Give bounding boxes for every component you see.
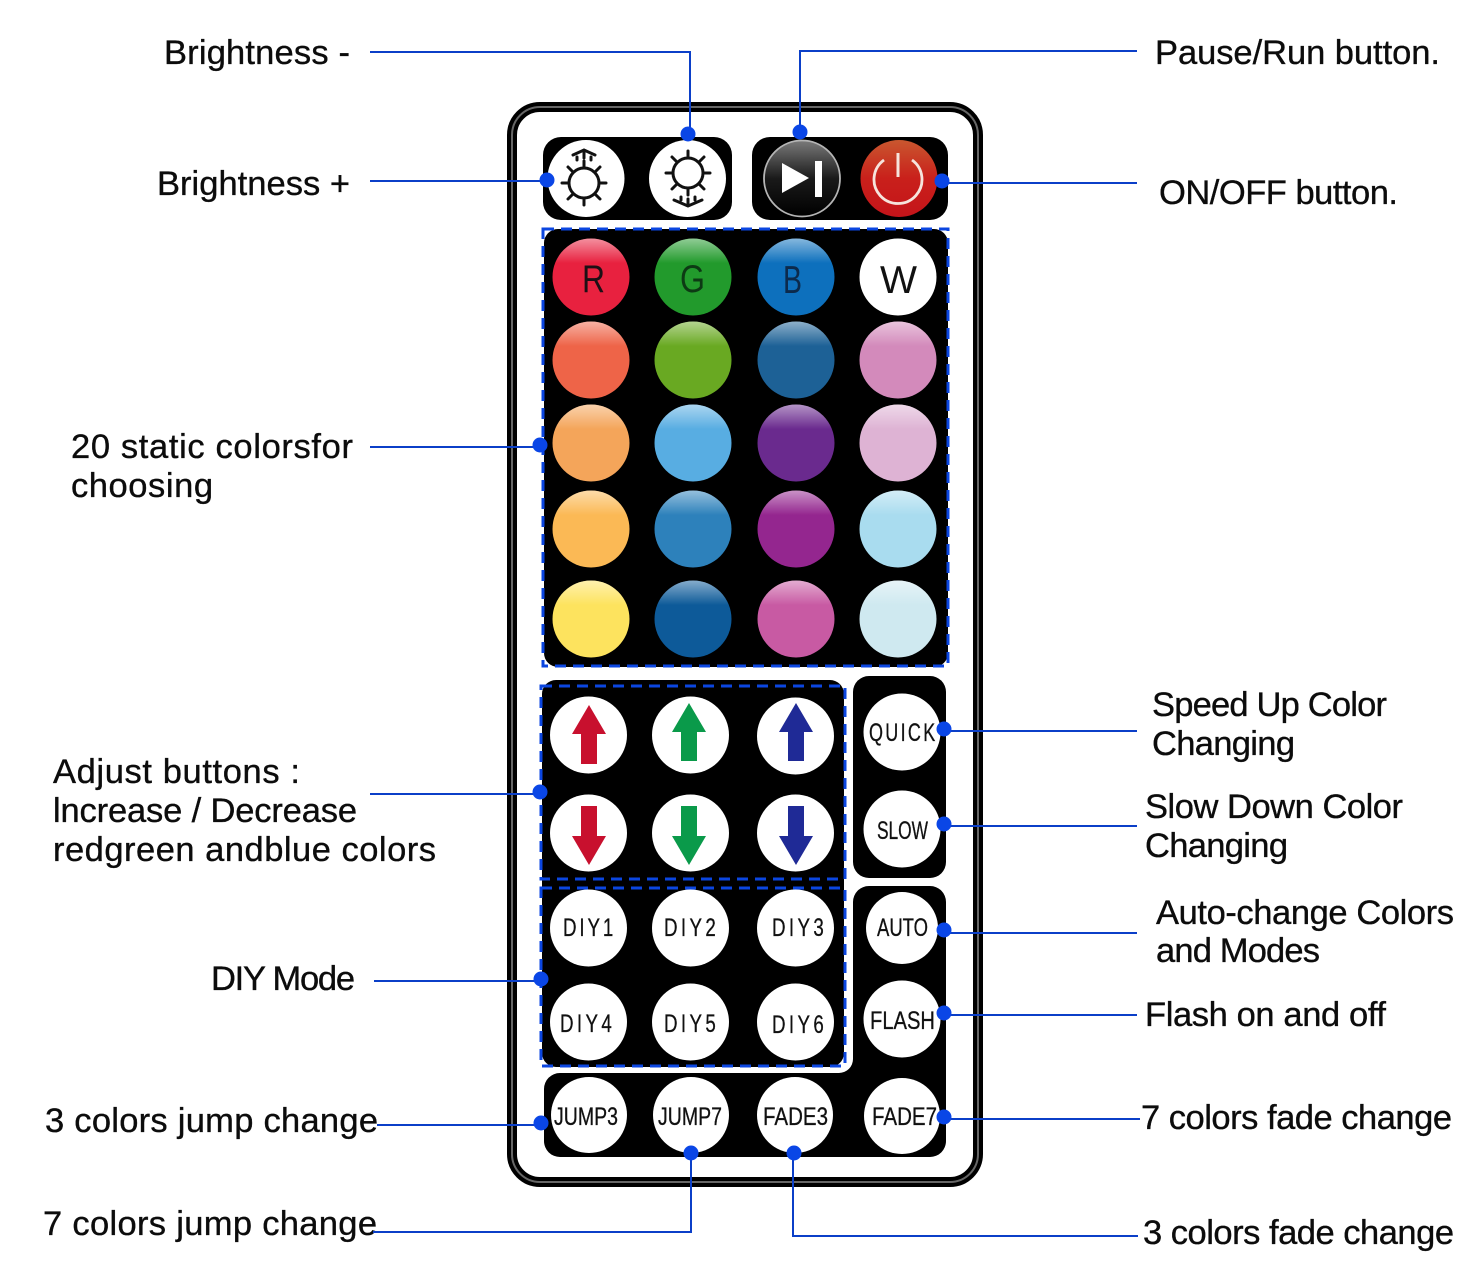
callout: Brightness -: Brightness - bbox=[164, 34, 350, 72]
DIY buttons: DIY1 bbox=[563, 913, 613, 942]
callout: auto change bbox=[936, 894, 1454, 970]
adjust buttons bbox=[541, 686, 845, 879]
callout: 3 colors fade change: 3 colors fade change bbox=[1143, 1214, 1454, 1252]
callout: 7 colors fade change: 7 colors fade change bbox=[1141, 1099, 1452, 1137]
panel: speed buttons: SLOW bbox=[877, 817, 928, 845]
callout: flash bbox=[936, 996, 1386, 1034]
panel: brightness buttons bbox=[543, 137, 732, 220]
callout: adjust buttons: Adjust buttons : bbox=[53, 753, 300, 791]
callout: DIY mode bbox=[211, 960, 548, 998]
row 1 colors: R bbox=[582, 258, 605, 301]
DIY buttons bbox=[541, 888, 845, 1066]
callout: 3 colors jump change bbox=[45, 1102, 548, 1140]
callout: Pause/Run button bbox=[792, 34, 1440, 140]
icon: brightness plus bbox=[548, 140, 624, 217]
icon: pause run bbox=[764, 140, 840, 216]
DIY buttons: DIY2 bbox=[664, 913, 716, 942]
callout: auto change: Auto-change Colors bbox=[1156, 894, 1454, 932]
callout: Brightness + bbox=[157, 165, 554, 203]
DIY buttons: DIY6 bbox=[772, 1010, 824, 1039]
callout: 20 static colors: choosing bbox=[71, 467, 213, 505]
panel: pause and power buttons bbox=[752, 137, 948, 220]
DIY buttons: DIY4 bbox=[560, 1009, 612, 1038]
callout: speed up: Speed Up Color bbox=[1152, 686, 1387, 724]
callout: Brightness +: Brightness + bbox=[157, 165, 350, 203]
DIY buttons: DIY5 bbox=[664, 1009, 716, 1038]
icon: brightness minus bbox=[649, 140, 726, 217]
callout: 3 colors jump change: 3 colors jump change bbox=[45, 1102, 378, 1140]
callout: speed up bbox=[936, 686, 1387, 763]
panel: speed buttons bbox=[853, 676, 946, 878]
panel: mode buttons bbox=[544, 886, 946, 1157]
row 1 colors: W bbox=[880, 259, 917, 302]
callout: ON/OFF button bbox=[934, 174, 1398, 212]
icon: power bbox=[860, 140, 938, 217]
row 4 colors bbox=[552, 490, 936, 568]
callout: flash: Flash on and off bbox=[1145, 996, 1386, 1034]
callout: Brightness - bbox=[164, 34, 696, 142]
panel: mode buttons: FLASH bbox=[870, 1007, 935, 1035]
row 2 colors bbox=[552, 322, 936, 398]
callout: 7 colors jump change bbox=[43, 1146, 698, 1243]
callout: slow down bbox=[936, 788, 1403, 865]
panel: 20 static colors bbox=[543, 229, 948, 667]
panel: mode buttons: AUTO bbox=[877, 914, 928, 942]
panel: speed buttons: QUICK bbox=[869, 718, 936, 747]
row 1 colors bbox=[552, 238, 936, 316]
callout: adjust buttons: redgreen andblue colors bbox=[53, 831, 436, 869]
callout: adjust buttons bbox=[53, 753, 548, 869]
callout: slow down: Slow Down Color bbox=[1145, 788, 1403, 826]
DIY buttons: DIY3 bbox=[772, 913, 824, 942]
callout: 7 colors fade change bbox=[936, 1099, 1452, 1137]
callout: 7 colors jump change: 7 colors jump change bbox=[43, 1205, 377, 1243]
callout: 20 static colors bbox=[71, 428, 548, 505]
callout: 3 colors fade change bbox=[786, 1146, 1454, 1252]
panel: mode buttons: JUMP3 bbox=[554, 1103, 618, 1131]
callout: speed up: Changing bbox=[1152, 725, 1295, 763]
panel: mode buttons: FADE7 bbox=[872, 1103, 937, 1131]
row 1 colors: B bbox=[783, 259, 802, 302]
row 3 colors bbox=[552, 404, 936, 482]
row 1 colors: G bbox=[680, 258, 705, 301]
callout: DIY mode: DIY Mode bbox=[211, 960, 355, 998]
panel: mode buttons: FADE3 bbox=[763, 1103, 828, 1131]
panel: adjust and DIY buttons bbox=[541, 680, 845, 1067]
panel: mode buttons: JUMP7 bbox=[658, 1103, 722, 1131]
callout: ON/OFF button: ON/OFF button. bbox=[1159, 174, 1398, 212]
remote control body bbox=[512, 107, 978, 1182]
callout: adjust buttons: lncrease / Decrease bbox=[53, 792, 357, 830]
callout: auto change: and Modes bbox=[1156, 932, 1320, 970]
row 5 colors bbox=[552, 580, 936, 658]
callout: 20 static colors: 20 static colorsfor bbox=[71, 428, 353, 466]
callout: Pause/Run button: Pause/Run button. bbox=[1155, 34, 1440, 72]
callout: slow down: Changing bbox=[1145, 827, 1288, 865]
